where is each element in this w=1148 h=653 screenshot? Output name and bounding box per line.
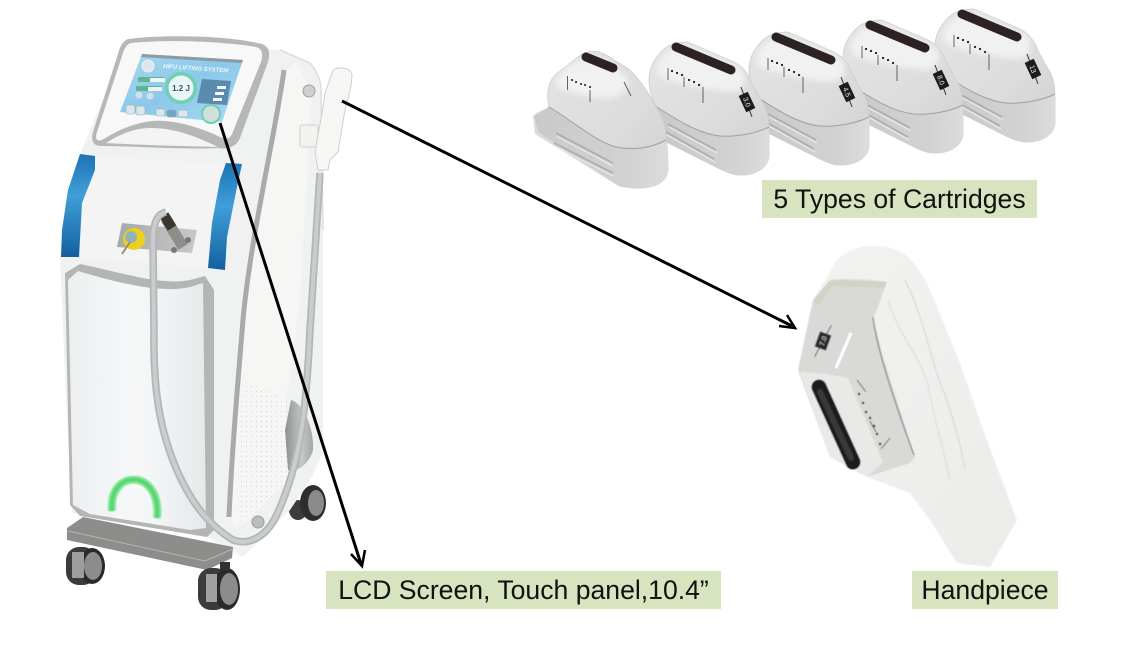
cartridge 3: 4.5 — [841, 87, 851, 98]
handpiece cartridge — [798, 279, 915, 477]
machine rear vent — [285, 400, 313, 470]
connector plate — [117, 215, 197, 254]
cartridge 5: 13 — [1027, 64, 1037, 74]
blue grip left — [61, 154, 95, 257]
lower panel — [68, 271, 206, 530]
rear body edge — [280, 50, 323, 230]
side panel shading — [228, 62, 312, 530]
green power arc — [112, 480, 157, 518]
arrow to handpiece — [342, 101, 795, 328]
ready button — [202, 105, 220, 123]
handpiece label tag — [811, 322, 835, 360]
rear wheel — [289, 485, 326, 521]
cartridge 4: 8.0 — [935, 75, 945, 86]
front-left wheel — [66, 547, 105, 585]
bezel — [92, 36, 269, 149]
handpiece — [798, 246, 1017, 567]
handpiece slot — [819, 387, 853, 462]
bottom buttons — [126, 105, 188, 117]
base plate — [67, 517, 233, 570]
screen title: HIFU LIFTING SYSTEM — [163, 64, 229, 75]
front centre panel — [79, 156, 226, 268]
handpiece holder — [300, 125, 318, 147]
handpiece depth marks — [857, 380, 890, 449]
label: handpiece: Handpiece — [921, 575, 1049, 605]
cartridge panel — [197, 79, 231, 105]
energy dial: 1.2 J — [172, 84, 190, 93]
cartridge 1 — [533, 51, 668, 188]
cartridge 3 — [749, 32, 869, 165]
machine — [60, 36, 352, 610]
blue grip right — [208, 163, 242, 270]
handpiece grip contour — [905, 280, 965, 470]
front-right wheel — [198, 562, 240, 610]
machine body — [60, 40, 323, 557]
knob on side — [252, 516, 264, 528]
handpiece label tag: 7.0 — [819, 335, 829, 347]
side knob — [303, 85, 315, 97]
lower panel surround — [65, 264, 214, 537]
cartridge 2: 3.0 — [741, 97, 751, 108]
key switch — [123, 228, 145, 250]
LCD screen — [120, 54, 243, 123]
cartridge 2 — [649, 42, 769, 175]
machine handpiece — [315, 68, 352, 170]
label: LCD screen: LCD Screen, Touch panel,10.4” — [338, 575, 709, 605]
side groove — [229, 70, 284, 517]
hose — [153, 173, 320, 542]
cartridges — [533, 9, 1055, 188]
cartridge 5 — [935, 9, 1055, 142]
exit button — [142, 60, 154, 72]
cartridge 4 — [843, 20, 963, 153]
label: handpiece — [912, 571, 1058, 609]
hose connector — [166, 219, 183, 247]
arrow to LCD screen — [220, 123, 365, 566]
cartridge face — [800, 372, 883, 477]
screen fields — [136, 77, 165, 91]
label: cartridges: 5 Types of Cartridges — [773, 184, 1026, 214]
